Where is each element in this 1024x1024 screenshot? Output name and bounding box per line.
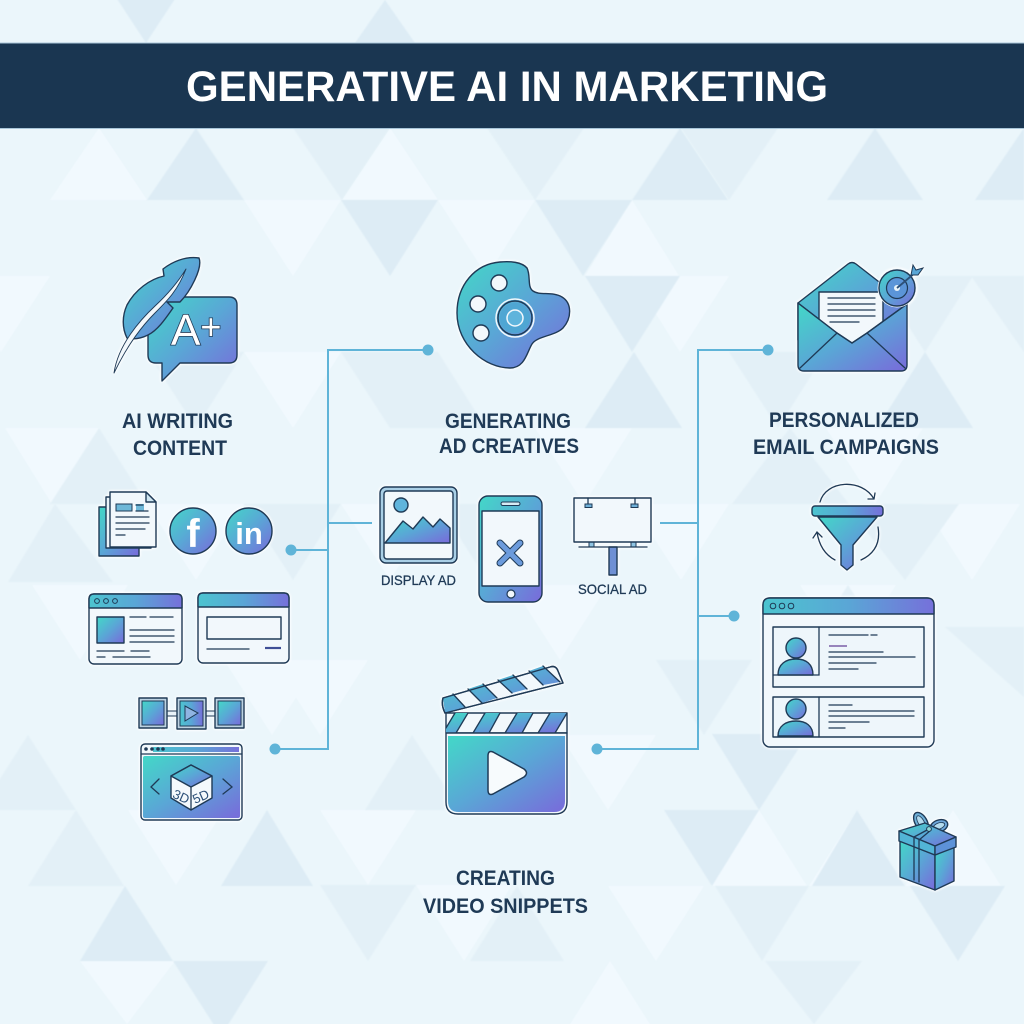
icon: gift box bbox=[899, 810, 956, 890]
label: creating video snippets: CREATING bbox=[456, 867, 555, 890]
A+ grade mark: A bbox=[171, 306, 200, 355]
label: personalized email campaigns bbox=[753, 409, 939, 459]
icon: smartphone with X bbox=[479, 496, 542, 602]
title: GENERATIVE AI IN MARKETING bbox=[186, 63, 828, 111]
connector lines: right tree bbox=[592, 344, 774, 754]
icon: article web page bbox=[89, 594, 182, 664]
icon: artist palette bbox=[457, 262, 570, 368]
profile card one bbox=[773, 627, 924, 687]
icon: personalized profile browser window bbox=[763, 598, 934, 747]
icon: film clapperboard bbox=[442, 666, 567, 814]
label: social ad: SOCIAL AD bbox=[578, 581, 647, 597]
label: creating video snippets bbox=[423, 867, 588, 918]
icon: LinkedIn circle bbox=[226, 508, 272, 554]
label: generating ad creatives: GENERATING bbox=[445, 410, 571, 433]
icon: Facebook circle bbox=[170, 508, 216, 556]
label: generating ad creatives: AD CREATIVES bbox=[439, 435, 579, 458]
cube labels: 3D bbox=[171, 786, 192, 807]
icon: 3D product viewer window: 5D bbox=[190, 786, 211, 807]
icon: feather quill and A+ speech bubble bbox=[114, 258, 237, 381]
icon: display ad image frame bbox=[380, 487, 457, 563]
icon: marketing funnel with cycle arrows bbox=[812, 484, 883, 570]
icon: video frames strip bbox=[139, 698, 244, 729]
label: AI writing content: CONTENT bbox=[133, 437, 227, 460]
icon: 3D product viewer window bbox=[141, 744, 242, 820]
icon: open email envelope with target bbox=[798, 262, 923, 371]
label: creating video snippets: VIDEO SNIPPETS bbox=[423, 895, 588, 918]
label: generating ad creatives bbox=[439, 410, 579, 458]
connector lines: left tree bbox=[270, 344, 434, 754]
icon: document stack bbox=[99, 492, 156, 556]
profile card two bbox=[773, 697, 924, 737]
icon: billboard bbox=[574, 498, 651, 575]
icon: Facebook circle: f bbox=[186, 512, 200, 556]
icon: banner web page bbox=[198, 593, 289, 663]
label: personalized email campaigns: EMAIL CAMPAIGNS bbox=[753, 436, 939, 459]
title banner bbox=[0, 42, 1024, 129]
icon: LinkedIn circle: in bbox=[235, 516, 263, 551]
A+ grade mark: + bbox=[200, 306, 221, 347]
label: AI writing content bbox=[122, 410, 233, 460]
label: personalized email campaigns: PERSONALIZED bbox=[769, 409, 919, 432]
target with arrow bbox=[878, 265, 923, 308]
label: AI writing content: AI WRITING bbox=[122, 410, 233, 433]
label: display ad: DISPLAY AD bbox=[381, 572, 456, 588]
